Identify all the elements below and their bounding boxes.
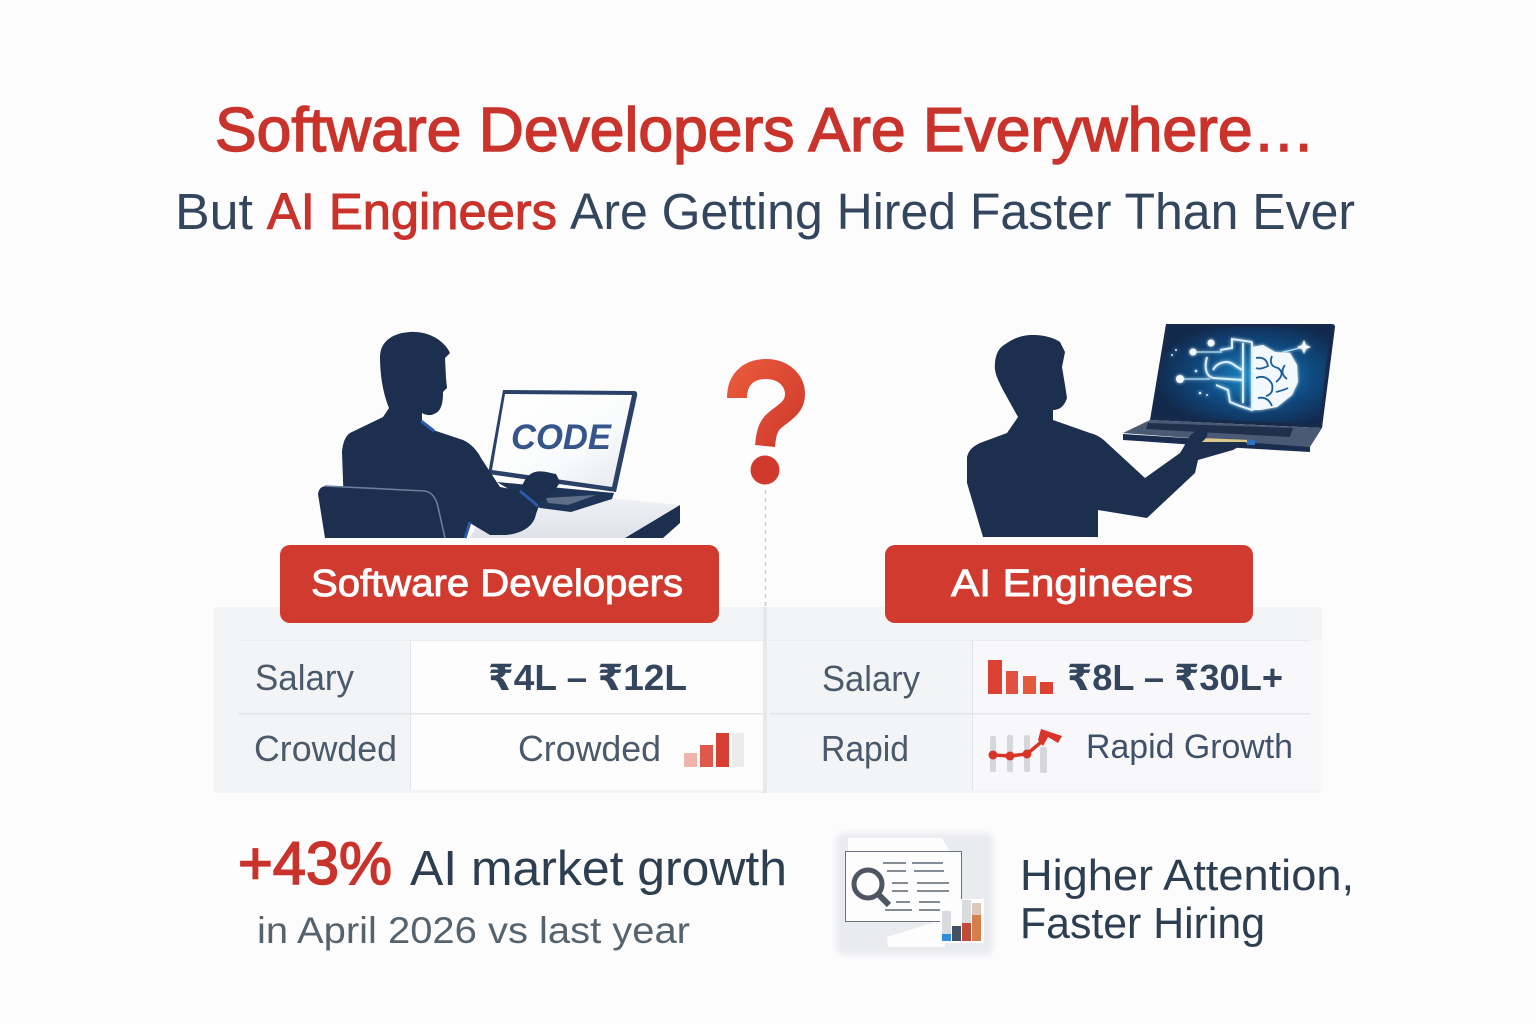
laptop with code screen: CODE: [511, 418, 613, 457]
icon: salary bars: [988, 660, 1053, 694]
engineer demand row: Rapid Growth: [1086, 728, 1293, 766]
icon: question mark: [737, 369, 795, 606]
brain and circuit: [1171, 339, 1311, 410]
icon: growth chart: [988, 729, 1062, 773]
title: Software Developers Are Everywhere…: [215, 96, 1315, 165]
icon: AI engineer with laptop: [967, 324, 1335, 537]
laptop with code screen: [488, 390, 637, 512]
developer salary row: [255, 657, 687, 698]
caption: higher attention, faster hiring: Higher Attention,: [1020, 851, 1354, 900]
icon: software developer at laptop: [318, 332, 680, 538]
stat: AI market growth: +43%: [238, 830, 392, 897]
subtitle: Are Getting Hired Faster Than Ever: [570, 183, 1355, 240]
icon: crowded bars: [684, 733, 744, 767]
subtitle: But: [175, 183, 253, 240]
developer demand row: [254, 728, 744, 769]
developer silhouette: [342, 332, 560, 538]
stat: AI market growth: AI market growth: [410, 842, 787, 896]
subtitle: AI Engineers: [267, 183, 557, 240]
desk: [470, 487, 680, 538]
engineer demand row: Rapid: [821, 728, 909, 769]
caption: higher attention, faster hiring: [1020, 851, 1354, 948]
developer salary row: ₹4L – ₹12L: [488, 657, 687, 698]
engineer salary row: Salary: [822, 658, 920, 699]
badge: Software Developers: [280, 545, 719, 623]
stat: AI market growth: in April 2026 vs last year: [257, 910, 690, 951]
engineer salary row: [822, 657, 1283, 699]
icon: document with magnifier and chart: [836, 833, 993, 955]
chair: [318, 486, 445, 538]
stat: AI market growth: [238, 830, 787, 951]
laptop with AI brain screen: [1123, 324, 1335, 452]
badge: AI Engineers: AI Engineers: [951, 563, 1193, 605]
engineer silhouette: [967, 335, 1247, 537]
developer salary row: Salary: [255, 657, 354, 698]
subtitle: [175, 183, 1355, 240]
developer demand row: Crowded: [254, 728, 397, 769]
comparison table background: [213, 607, 1322, 793]
badge: Software Developers: Software Developers: [311, 563, 683, 605]
developer demand row: Crowded: [518, 728, 661, 769]
caption: higher attention, faster hiring: Faster Hiring: [1020, 899, 1265, 948]
badge: AI Engineers: [885, 545, 1253, 623]
engineer demand row: [821, 728, 1293, 773]
engineer salary row: ₹8L – ₹30L+: [1067, 657, 1283, 698]
